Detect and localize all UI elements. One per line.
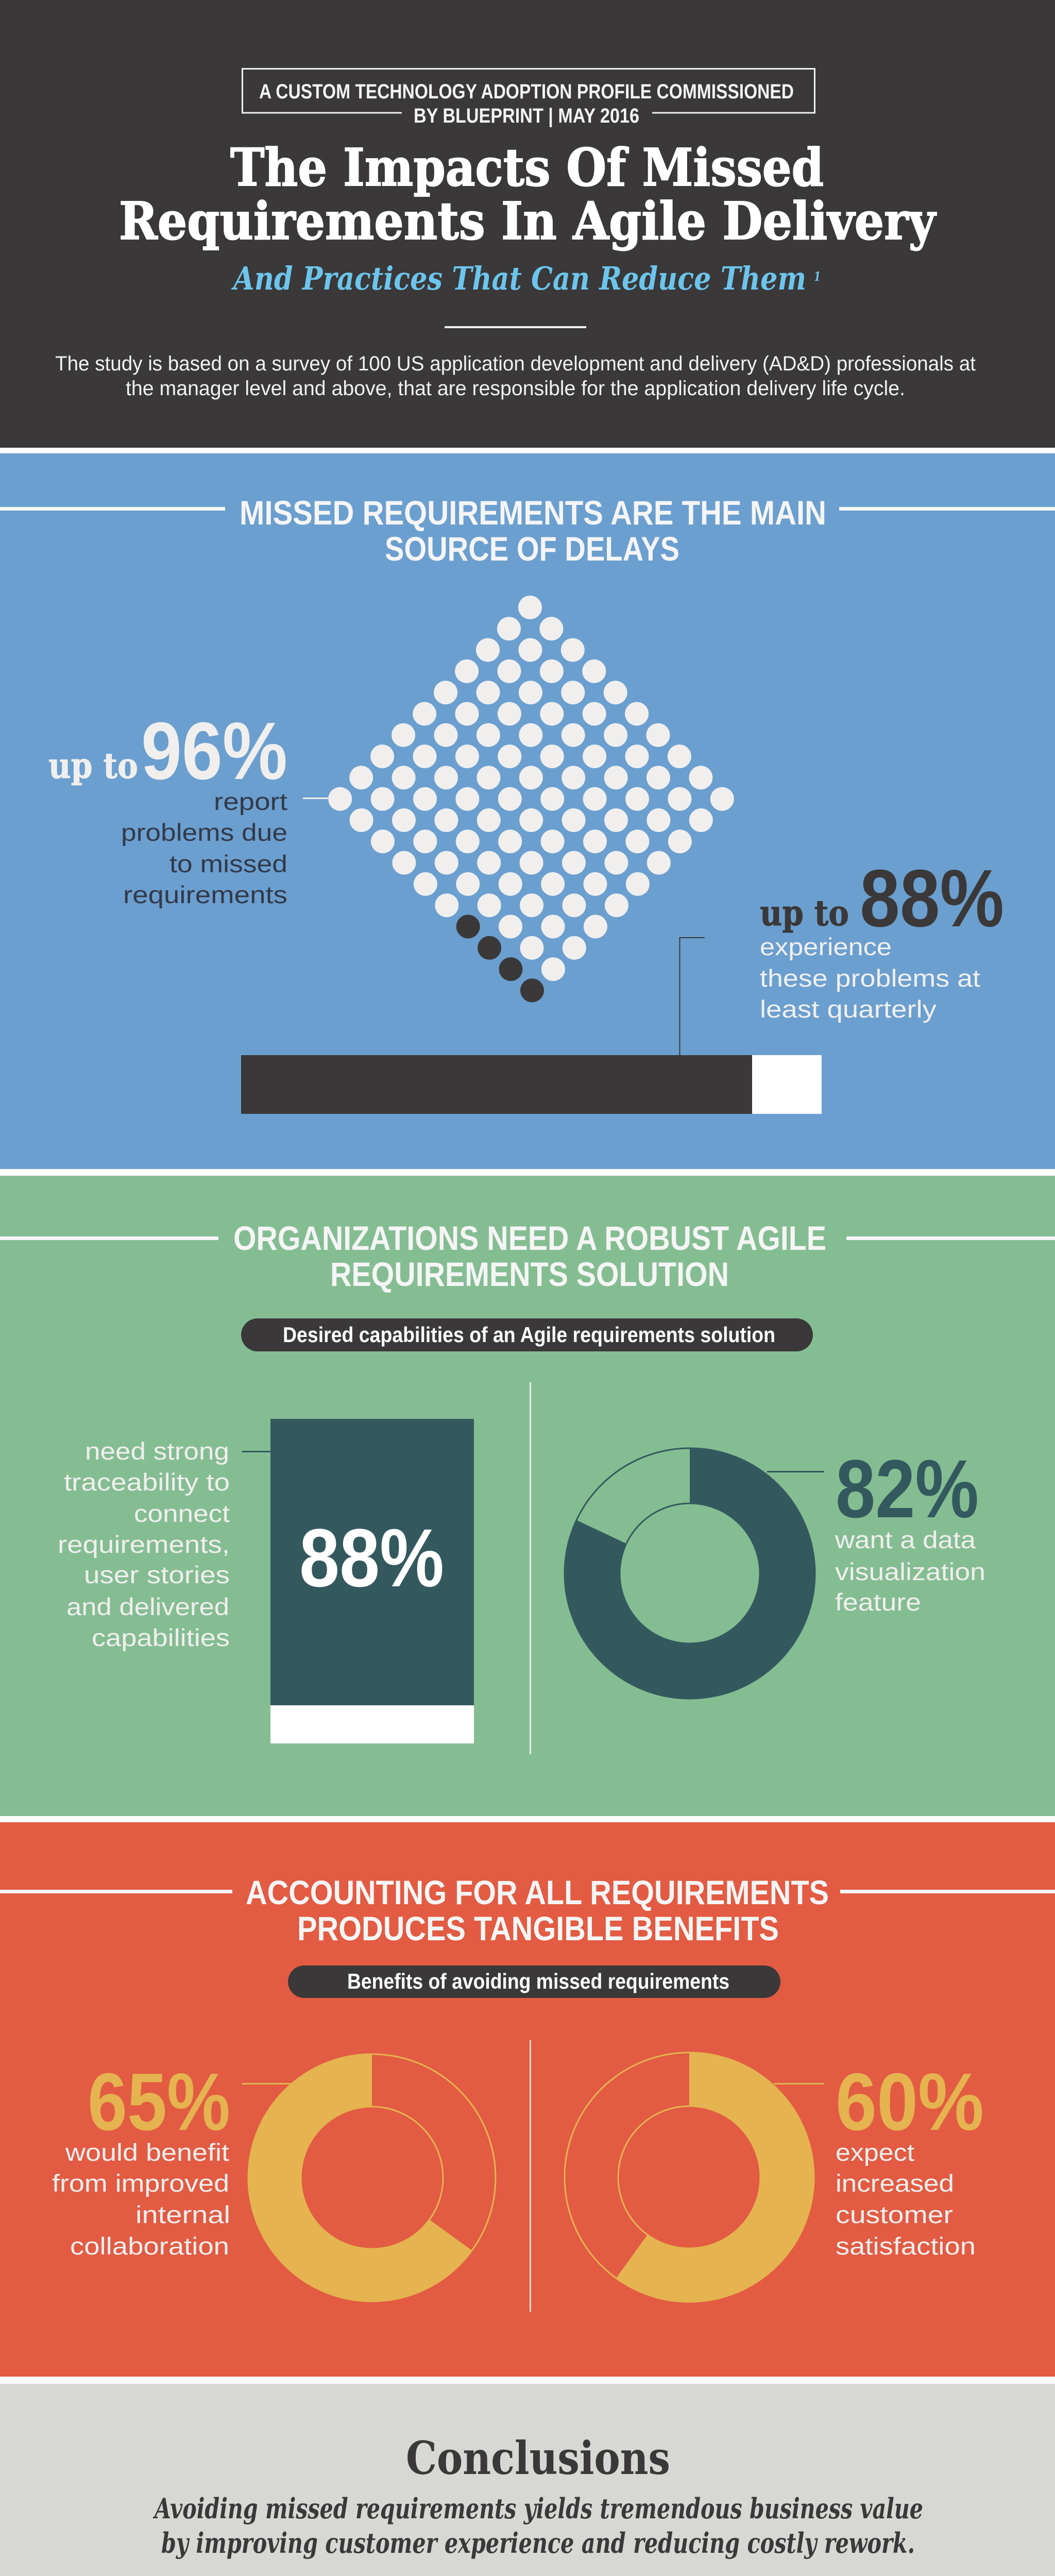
donut chart: 65 percent bbox=[248, 2054, 496, 2302]
donut chart: 60 percent bbox=[565, 2052, 814, 2302]
callout: 88 percent: least quarterly bbox=[760, 995, 937, 1023]
text: traceability: user stories bbox=[84, 1561, 230, 1588]
callout: 96 percent: requirements bbox=[123, 881, 287, 908]
intro paragraph: The study is based on a survey of 100 US application development and delivery (AD&D) professionals at bbox=[55, 352, 976, 375]
callout: 82 percent: visualization bbox=[835, 1558, 985, 1585]
heading: agile requirements bbox=[0, 1219, 1055, 1293]
heading: missed requirements bbox=[0, 494, 1055, 568]
callout: 82 percent bbox=[835, 1443, 985, 1616]
callout: 65 percent: internal bbox=[135, 2201, 230, 2228]
pill: benefits: Benefits of avoiding missed requirements bbox=[347, 1969, 729, 1993]
bar chart: 88 percent traceability bbox=[270, 1419, 474, 1743]
title bbox=[119, 137, 937, 251]
text: traceability: connect bbox=[134, 1500, 230, 1527]
callout: 88 percent: up to bbox=[760, 893, 849, 934]
bar chart: 88 percent traceability: 88% bbox=[299, 1512, 444, 1604]
callout: 60 percent bbox=[836, 2057, 984, 2260]
callout: 82 percent: feature bbox=[835, 1588, 921, 1616]
callout: 65 percent: from improved bbox=[52, 2170, 229, 2197]
badge: commission note bbox=[242, 69, 815, 127]
callout: 82 percent: want a data bbox=[835, 1526, 976, 1553]
subtitle: 1 bbox=[814, 269, 821, 284]
badge: commission note: BY BLUEPRINT | MAY 2016 bbox=[414, 105, 639, 127]
text: traceability: traceability to bbox=[64, 1468, 230, 1496]
subtitle: And Practices That Can Reduce Them bbox=[231, 260, 806, 297]
bar chart: 88 percent bbox=[241, 1055, 822, 1114]
callout: 60 percent: 60% bbox=[836, 2057, 984, 2147]
callout: 60 percent: customer bbox=[836, 2201, 953, 2228]
heading: conclusions: Conclusions bbox=[406, 2431, 670, 2485]
callout: 88 percent: experience bbox=[760, 933, 892, 960]
intro paragraph bbox=[55, 352, 976, 400]
callout: 96 percent: up to bbox=[48, 745, 138, 787]
callout: 96 percent: problems due bbox=[121, 819, 287, 846]
heading: missed requirements: SOURCE OF DELAYS bbox=[385, 530, 679, 568]
heading: tangible benefits: ACCOUNTING FOR ALL REQUIREMENTS bbox=[246, 1873, 829, 1911]
callout: 96 percent: report bbox=[214, 788, 287, 815]
heading: tangible benefits: PRODUCES TANGIBLE BENEFITS bbox=[297, 1909, 779, 1947]
callout: 60 percent: expect bbox=[836, 2139, 914, 2166]
panel: header bbox=[0, 0, 1055, 448]
chart: diamond of 100 dots, 96 white bbox=[328, 596, 734, 1002]
callout: 88 percent bbox=[760, 853, 1004, 1023]
callout: 65 percent: collaboration bbox=[70, 2232, 229, 2260]
panel: tangible benefits bbox=[0, 1822, 1055, 2377]
callout: 65 percent: 65% bbox=[88, 2057, 230, 2147]
callout: 96 percent bbox=[48, 706, 287, 908]
callout: 96 percent: to missed bbox=[169, 850, 287, 877]
text: traceability: and delivered bbox=[66, 1593, 229, 1620]
callout: 88 percent: 88% bbox=[860, 853, 1004, 944]
heading: agile requirements: REQUIREMENTS SOLUTION bbox=[330, 1255, 729, 1293]
panel: conclusions bbox=[0, 2384, 1055, 2576]
text: conclusion statement bbox=[152, 2492, 923, 2560]
donut chart: 82 percent bbox=[564, 1448, 815, 1699]
callout: 60 percent: increased bbox=[836, 2170, 954, 2197]
panel: missed requirements bbox=[0, 453, 1055, 1169]
text: traceability: need strong bbox=[85, 1437, 229, 1465]
heading: tangible benefits bbox=[0, 1873, 1055, 1947]
intro paragraph: the manager level and above, that are responsible for the application delivery life cycle. bbox=[126, 377, 905, 400]
title: The Impacts Of Missed bbox=[230, 137, 824, 198]
callout: 96 percent: 96% bbox=[141, 706, 287, 796]
callout: 65 percent bbox=[52, 2057, 230, 2260]
callout: 60 percent: satisfaction bbox=[836, 2232, 976, 2260]
pill: desired capabilities bbox=[241, 1318, 813, 1351]
text: traceability: capabilities bbox=[92, 1624, 230, 1651]
text: traceability bbox=[58, 1437, 230, 1651]
panel: agile requirements solution bbox=[0, 1176, 1055, 1816]
badge: commission note: A CUSTOM TECHNOLOGY ADOPTION PROFILE COMMISSIONED bbox=[259, 80, 794, 103]
heading: agile requirements: ORGANIZATIONS NEED A ROBUST AGILE bbox=[233, 1219, 826, 1257]
callout: 82 percent: 82% bbox=[836, 1443, 979, 1535]
heading: missed requirements: MISSED REQUIREMENTS ARE THE MAIN bbox=[240, 494, 826, 532]
callout: 65 percent: would benefit bbox=[65, 2139, 229, 2166]
pill: desired capabilities: Desired capabilities of an Agile requirements solution bbox=[283, 1323, 775, 1347]
title: Requirements In Agile Delivery bbox=[119, 191, 937, 251]
text: traceability: requirements, bbox=[58, 1531, 230, 1558]
pill: benefits bbox=[288, 1965, 780, 1998]
callout: 88 percent: these problems at bbox=[760, 964, 980, 992]
